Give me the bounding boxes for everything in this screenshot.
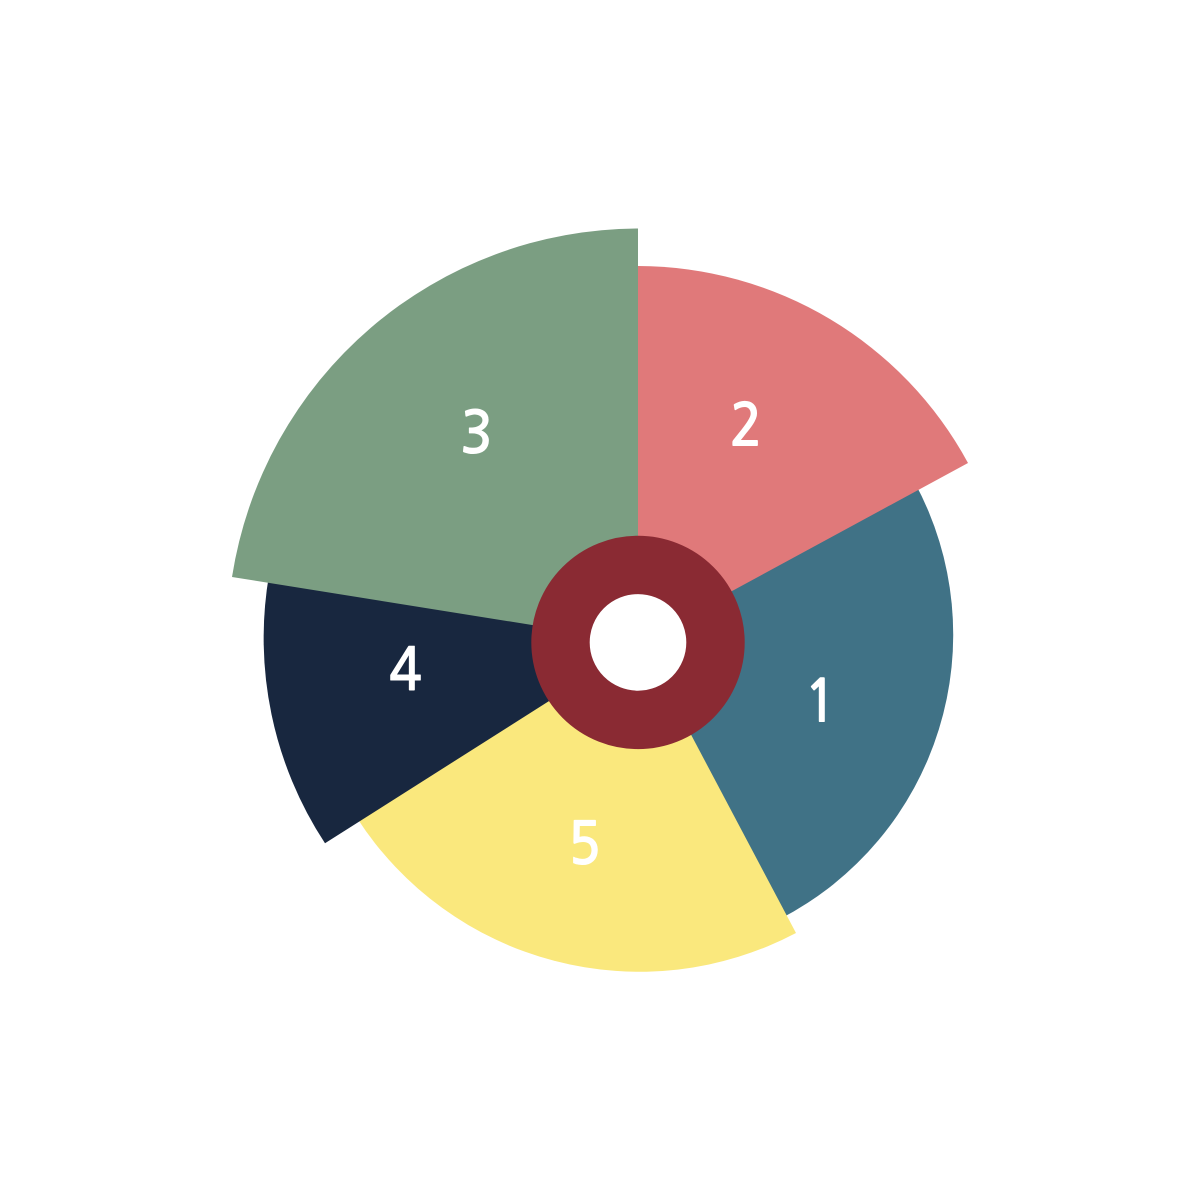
segment 2: coral wedge: 2 — [729, 397, 763, 455]
segment 1: teal wedge: 1 — [804, 673, 837, 731]
segment 3: green wedge: 3 — [460, 404, 493, 463]
segment 2: coral wedge — [638, 266, 968, 642]
segment 5: yellow wedge: 5 — [568, 815, 601, 874]
segment 5: yellow wedge — [357, 642, 796, 972]
segment 3: green wedge — [232, 228, 638, 642]
segment 4: navy wedge — [264, 575, 642, 843]
segment 4: navy wedge: 4 — [389, 641, 422, 700]
center ring — [560, 565, 716, 720]
segment 1: teal wedge — [642, 483, 953, 919]
